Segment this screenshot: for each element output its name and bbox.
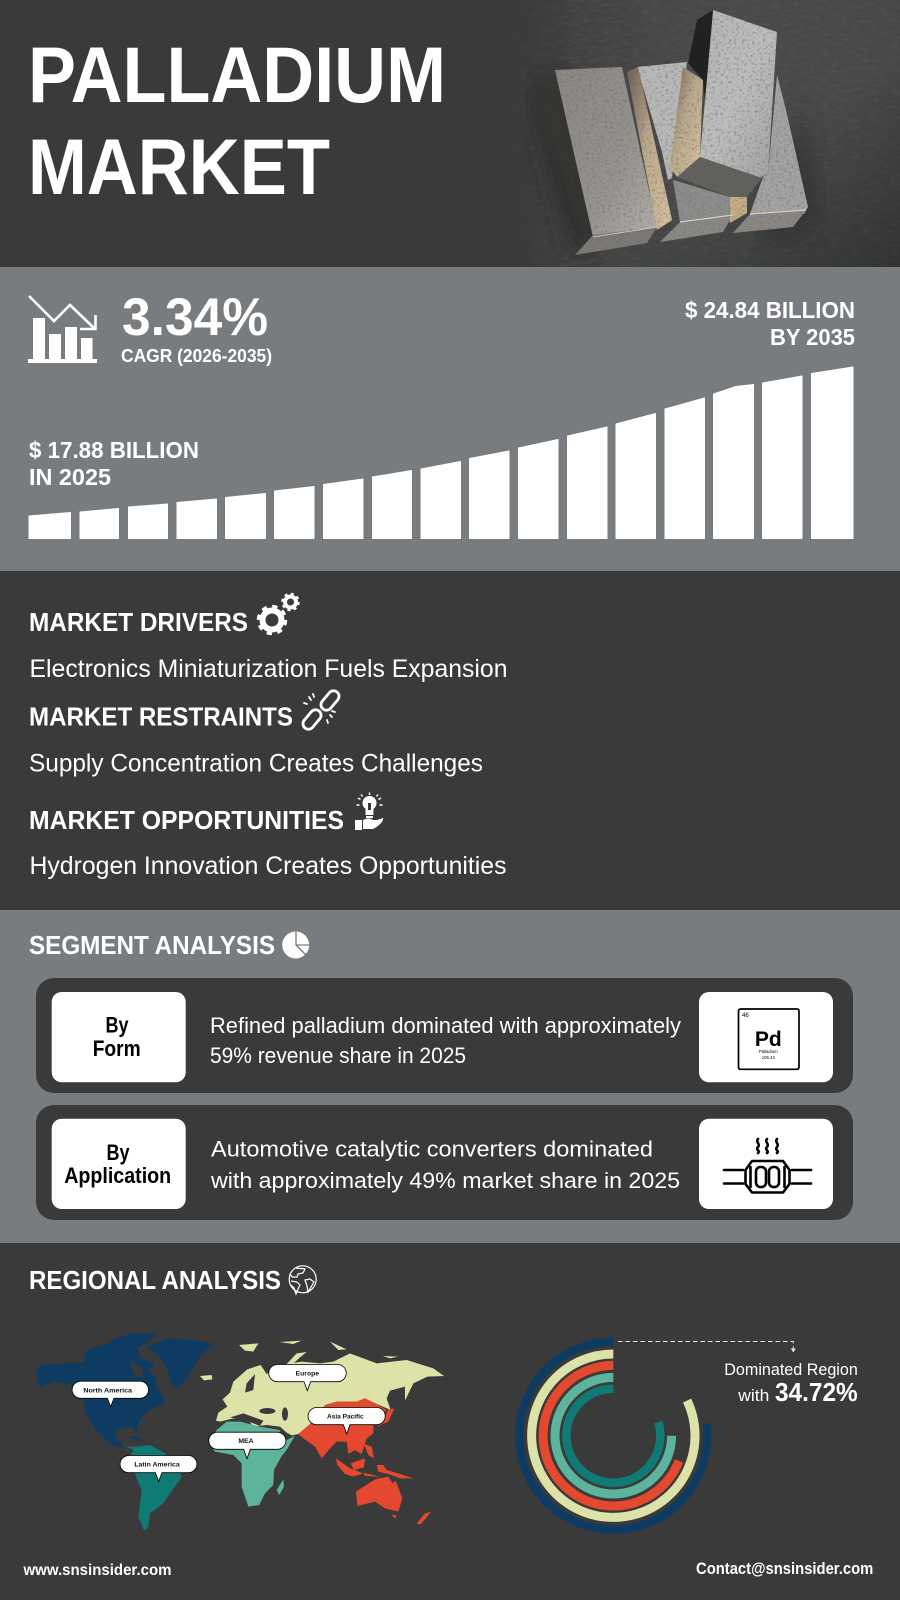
label box: by form [52,992,186,1082]
region: Middle East and Africa [210,1422,295,1507]
form description: 59% revenue share in 2025 [210,1043,466,1068]
label box: by form: Form [93,1036,141,1061]
region: Latin America [121,1443,182,1531]
callout: MEA [209,1432,286,1459]
form description [210,1013,682,1068]
title [28,30,446,211]
callout: Europe: Europe [296,1371,319,1378]
form description: Refined palladium dominated with approximately [210,1013,682,1038]
icon: palladium element tile: Pd [755,1028,782,1051]
region: North America [36,1333,213,1447]
icon: hand with light bulb [355,792,383,830]
footer: website: www.snsinsider.com [23,1562,172,1579]
start value: IN 2025 [29,464,111,490]
callout: North America: North America [83,1387,132,1394]
icon: pie chart [282,931,310,958]
icon: palladium element tile: 46 [742,1013,749,1019]
callout: Latin America [120,1455,197,1481]
icon: palladium element tile: Palladium [759,1049,778,1054]
callout: dominated region share [724,1361,858,1407]
arrow: dashed leader to dominated region [618,1342,796,1352]
callout: Asia Pacific [308,1407,385,1434]
segment analysis heading: SEGMENT ANALYSIS [29,930,275,960]
CAGR figure: 3.34% [122,288,268,347]
end value: $ 24.84 BILLION [685,297,855,323]
callout: North America [72,1381,149,1407]
icon: catalytic converter [699,1119,833,1209]
market drivers heading: MARKET DRIVERS [29,607,248,637]
footer: contact: Contact@snsinsider.com [696,1560,873,1578]
icon: globe [289,1266,316,1294]
region: Asia Pacific [298,1398,431,1524]
callout: dominated region share: with [737,1387,769,1405]
application description: with approximately 49% market share in 2025 [210,1168,680,1193]
label box: by application [52,1119,186,1209]
start value: $ 17.88 BILLION [29,437,199,463]
panel: regional analysis [0,1243,900,1600]
panel: segment analysis [0,910,900,1243]
card: by application [36,1105,853,1220]
opportunity text: Hydrogen Innovation Creates Opportunities [30,852,506,880]
icon: palladium element tile: 106.42 [762,1055,775,1060]
title: MARKET [28,122,330,211]
radial bar chart: regional share [519,1342,707,1530]
label box: by form: By [106,1013,129,1038]
hudson bay [131,1362,143,1377]
application description [210,1137,680,1193]
callout: Europe [269,1364,346,1391]
regional analysis heading: REGIONAL ANALYSIS [29,1265,281,1295]
callout: Latin America: Latin America [134,1461,180,1468]
label box: by application: Application [64,1163,171,1188]
callout: MEA: MEA [238,1438,254,1445]
world map [36,1333,444,1531]
callout: dominated region share: 34.72% [775,1377,858,1407]
icon: gears [258,594,298,634]
title: PALLADIUM [28,30,446,119]
end value: BY 2035 [770,324,855,350]
bar chart: market growth 2025-2035 [29,367,853,538]
end value [685,297,855,350]
panel: header [0,0,900,267]
market restraints heading: MARKET RESTRAINTS [29,702,293,732]
restraint text: Supply Concentration Creates Challenges [29,750,483,778]
callout: dominated region share: Dominated Region [724,1361,858,1379]
driver text: Electronics Miniaturization Fuels Expansion [30,655,508,683]
dark seas [230,1374,288,1426]
icon: palladium element tile [699,992,833,1082]
panel: market dynamics [0,571,900,910]
photo: palladium ingots [500,0,900,267]
market opportunities heading: MARKET OPPORTUNITIES [29,805,344,835]
label box: by application: By [106,1140,130,1165]
card: by form [36,978,853,1093]
callout: Asia Pacific: Asia Pacific [327,1414,364,1421]
start value [29,437,199,490]
CAGR figure: CAGR (2026-2035) [121,346,272,366]
icon: chart with falling arrow [28,296,97,363]
region: Europe and Russia [200,1341,444,1435]
application description: Automotive catalytic converters dominated [211,1137,653,1162]
panel: market size [0,267,900,571]
icon: broken chain [301,689,341,731]
